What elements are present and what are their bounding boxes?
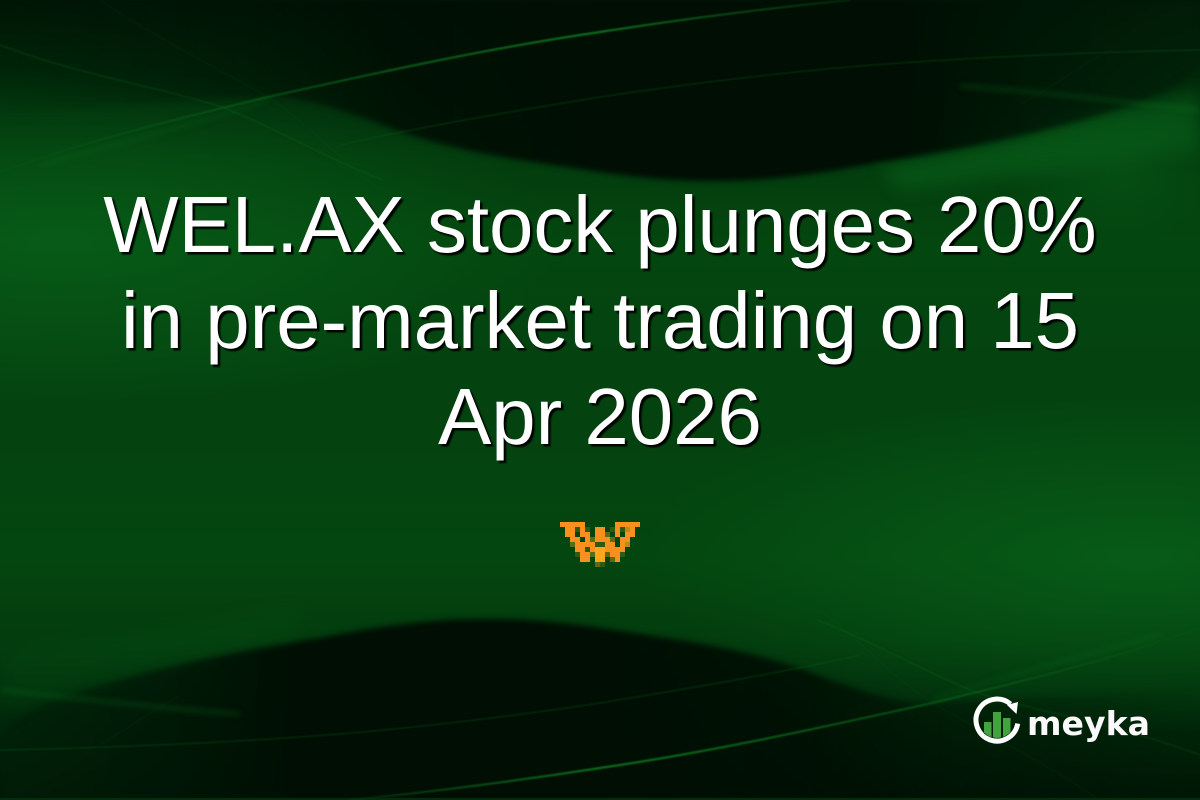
wordmark: meyka xyxy=(1027,704,1150,743)
title: WEL.AX stock plunges 20% xyxy=(103,180,1097,269)
title xyxy=(103,180,1097,464)
title: Apr 2026 xyxy=(438,372,762,461)
icon: orange pixel W company logo xyxy=(560,522,640,567)
logo: meyka brand mark and wordmark xyxy=(973,696,1150,744)
icon: circular arrow with green bars xyxy=(976,699,1018,742)
title: in pre-market trading on 15 xyxy=(121,276,1079,365)
